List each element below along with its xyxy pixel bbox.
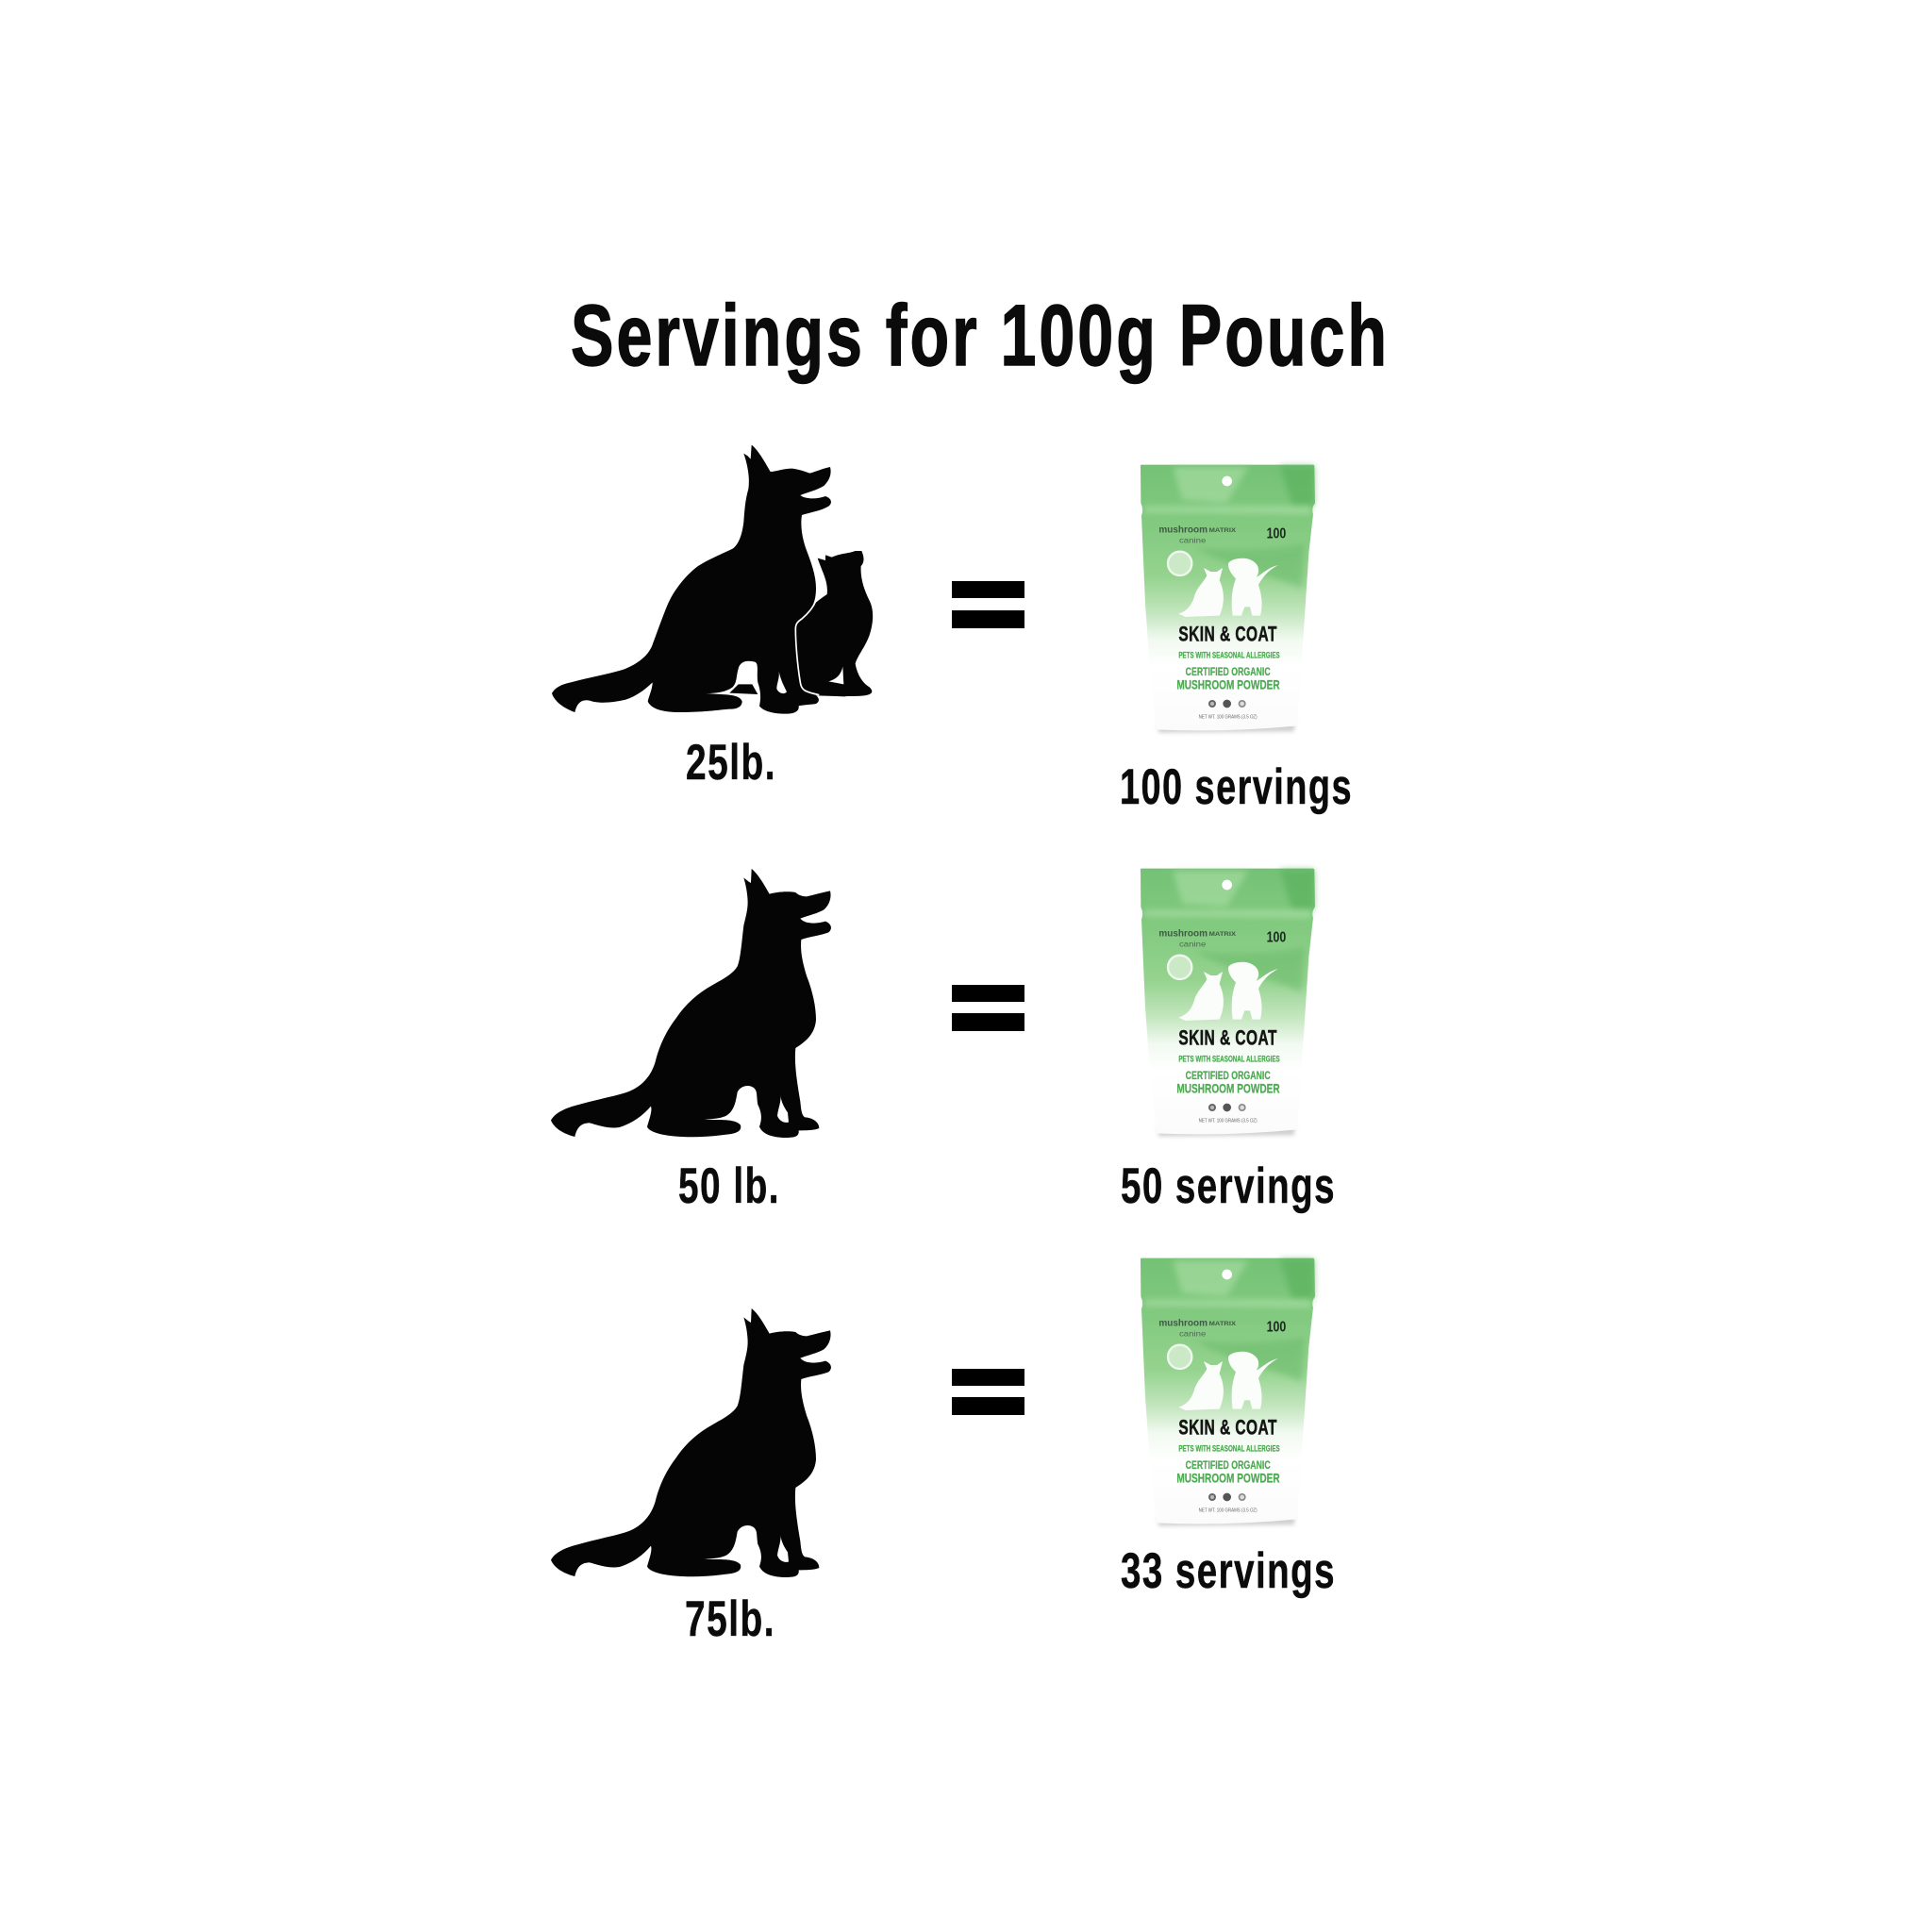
product pouch: NET WT. 100 GRAMS (3.5 OZ) [1199,1119,1257,1124]
label: 75lb.: 75lb. [685,1591,775,1647]
product pouch: CERTIFIED ORGANIC [1186,665,1271,678]
product pouch [1141,869,1315,1137]
product pouch [1141,465,1315,733]
product pouch: PETS WITH SEASONAL ALLERGIES [1178,1055,1280,1064]
product pouch: canine [1179,1329,1207,1338]
label: 25lb.: 25lb. [686,735,776,791]
product pouch: PETS WITH SEASONAL ALLERGIES [1178,651,1280,660]
product pouch: canine [1179,536,1207,544]
icon: equals sign [952,985,1024,1031]
product pouch: MUSHROOM POWDER [1176,1081,1280,1096]
product pouch: canine [1179,940,1207,948]
product pouch: SKIN & COAT [1178,1415,1277,1439]
product pouch: CERTIFIED ORGANIC [1186,1069,1271,1082]
product pouch: mushroom [1158,1319,1208,1329]
label: 50 servings: 50 servings [1121,1158,1336,1214]
icon: equals sign [952,1369,1024,1415]
label: 100 servings: 100 servings [1120,759,1353,815]
product pouch: NET WT. 100 GRAMS (3.5 OZ) [1199,1508,1257,1514]
icon: dog and cat silhouette [552,445,873,714]
product pouch: PETS WITH SEASONAL ALLERGIES [1178,1444,1280,1454]
icon: dog silhouette [551,869,831,1138]
icon: equals sign [952,581,1024,628]
cat silhouette [792,551,873,696]
title: Servings for 100g Pouch [571,288,1390,384]
product pouch: SKIN & COAT [1178,622,1277,645]
row 2: 50 lb [551,869,1336,1214]
product pouch: NET WT. 100 GRAMS (3.5 OZ) [1199,715,1257,721]
product pouch: CERTIFIED ORGANIC [1186,1458,1271,1472]
product pouch: MUSHROOM POWDER [1176,1471,1280,1486]
label: 33 servings: 33 servings [1121,1543,1336,1599]
row 1: 25 lb [552,445,1353,815]
product pouch: SKIN & COAT [1178,1025,1277,1049]
product pouch: 100 [1267,1320,1286,1336]
row 3: 75 lb [551,1258,1336,1647]
product pouch [1141,1258,1315,1526]
product pouch: MATRIX [1209,528,1236,534]
product pouch: MATRIX [1209,932,1236,938]
product pouch: mushroom [1158,929,1208,940]
product pouch: mushroom [1158,525,1208,536]
product pouch: MATRIX [1209,1322,1236,1327]
product pouch: 100 [1267,930,1286,946]
dog silhouette [552,445,831,714]
label: 50 lb.: 50 lb. [678,1158,780,1214]
icon: dog silhouette [551,1308,831,1577]
product pouch: 100 [1267,526,1286,542]
product pouch: MUSHROOM POWDER [1176,677,1280,692]
